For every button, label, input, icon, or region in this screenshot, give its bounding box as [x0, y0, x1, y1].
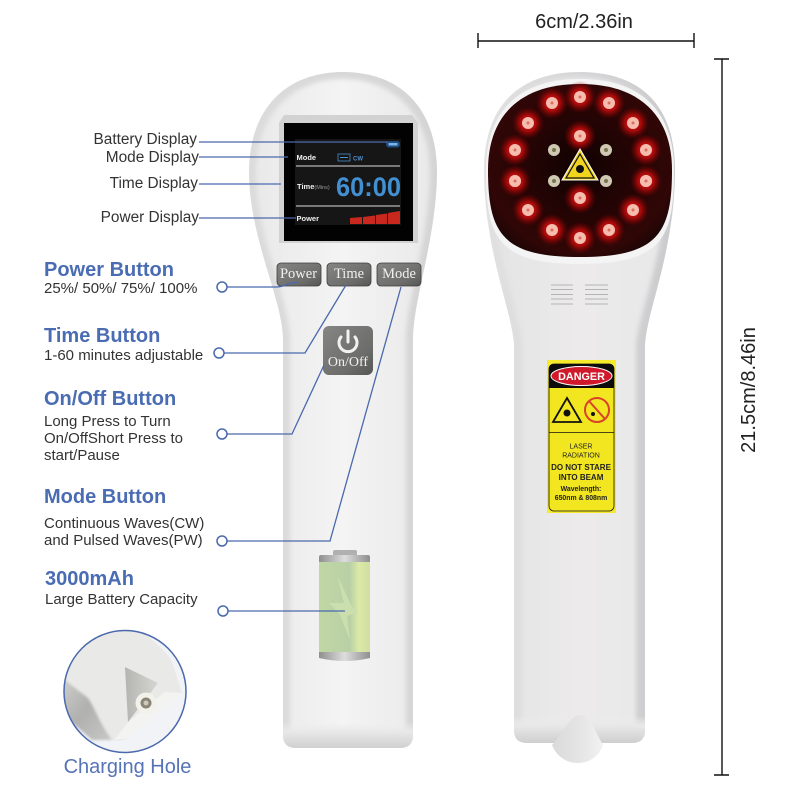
callout: on/off button: On/Off Button: [44, 388, 176, 410]
callout: time button: Time Button: [44, 325, 160, 347]
mode label: Mode: [296, 153, 316, 162]
power bars: [350, 211, 400, 224]
right device body: [480, 60, 680, 763]
danger label: [547, 360, 616, 513]
callout: mode button: and Pulsed Waves(PW): [44, 532, 203, 549]
button: mode: [377, 263, 421, 286]
callout: on/off button: On/OffShort Press to: [44, 430, 183, 447]
LED head face: [486, 79, 674, 264]
display callout labels: Mode Display: [106, 149, 199, 166]
callout: mode button: Mode Button: [44, 486, 166, 508]
power label: Power: [296, 214, 319, 223]
callout: mode button: Continuous Waves(CW): [44, 515, 204, 532]
height dimension: [714, 59, 760, 775]
callout: battery capacity: 3000mAh: [45, 568, 134, 590]
charging hole caption: Charging Hole: [64, 756, 191, 778]
label text: 650nm & 808nm: [555, 495, 607, 502]
display callout labels: Power Display: [101, 209, 199, 226]
button: on/off: On/Off: [328, 355, 368, 370]
callout: battery capacity: Large Battery Capacity: [45, 591, 198, 608]
callout: on/off button: start/Pause: [44, 447, 120, 464]
callout: time button: [44, 285, 346, 364]
mode icon: CW: [353, 156, 363, 162]
red LED lenses: [509, 91, 652, 244]
callout: power button: Power Button: [44, 259, 174, 281]
button: power: Power: [280, 266, 317, 282]
button: time: [327, 263, 371, 286]
left device body: [249, 72, 437, 748]
label text: INTO BEAM: [559, 473, 604, 482]
red LED centres: [514, 96, 648, 240]
time value: 60:00: [336, 172, 401, 202]
icon: laser hazard: [553, 398, 581, 422]
callout: battery capacity: [45, 568, 345, 616]
label text: DO NOT STARE: [551, 463, 612, 472]
speaker vents: [551, 285, 608, 304]
button: mode: Mode: [382, 266, 416, 282]
callout: power button: 25%/ 50%/ 75%/ 100%: [44, 280, 197, 297]
battery indicator: [386, 141, 400, 148]
icon: battery: [319, 550, 370, 661]
label text: LASER: [570, 444, 592, 450]
icon: no staring: [585, 398, 609, 422]
infrared LEDs: [548, 144, 612, 187]
button: power: [277, 263, 321, 286]
callout: on/off button: Long Press to Turn: [44, 413, 171, 430]
button: time: Time: [334, 266, 364, 282]
callout: power button: [44, 259, 298, 297]
width dimension: [478, 11, 694, 48]
display callout labels: Time Display: [110, 175, 198, 192]
display screen: [279, 115, 418, 243]
label text: Wavelength:: [561, 486, 601, 493]
label text: [551, 444, 612, 502]
red LED glows: [499, 81, 662, 254]
charging hole inset: [55, 625, 186, 752]
icon: laser warning triangle: [562, 149, 598, 180]
label text: RADIATION: [562, 452, 600, 460]
display callout labels: [94, 131, 199, 226]
danger label: DANGER: [558, 371, 605, 383]
callout: on/off button: [44, 365, 324, 464]
callout: time button: 1-60 minutes adjustable: [44, 347, 203, 364]
width dimension: 6cm/2.36in: [535, 11, 633, 33]
callout: mode button: [44, 287, 401, 549]
bottom nub: [552, 715, 603, 763]
time label: Time(Mins): [297, 182, 330, 191]
display callout labels: Battery Display: [94, 131, 197, 148]
height dimension: 21.5cm/8.46in: [738, 327, 760, 453]
display callout lines: [199, 142, 388, 218]
button: on/off: [323, 326, 373, 375]
